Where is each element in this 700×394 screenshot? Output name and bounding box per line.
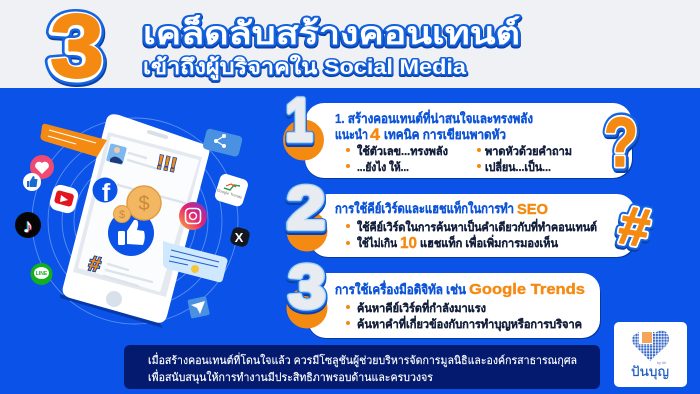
number 3: 3 xyxy=(288,254,326,320)
icon: send xyxy=(187,296,210,319)
tip 2 bullets: 10 xyxy=(400,235,417,252)
closing line 2: เพื่อสนับสนุนให้การทำงานมีประสิทธิภาพรอบด้านและครบวงจร xyxy=(148,369,433,384)
tip 1 subheading: 4 xyxy=(370,125,381,144)
tip 2 heading: การใช้คีย์เวิร์ดและแฮชแท็กในการทำ xyxy=(335,199,514,216)
big number 3: 3 xyxy=(49,0,103,98)
logo wordmark: ปันบุญ xyxy=(631,364,669,380)
panel: tip 1 xyxy=(283,86,639,183)
icon: question mark: ? xyxy=(604,103,638,181)
tip 1 bullets: พาดหัวด้วยคำถาม xyxy=(485,144,572,158)
icon: question mark: ? xyxy=(604,103,638,181)
home button xyxy=(106,291,122,307)
card 2 background xyxy=(310,198,636,258)
tip 2 bullets: แฮชแท็ก เพื่อเพิ่มการมองเห็น xyxy=(420,234,558,250)
card 3 background xyxy=(308,277,601,339)
number 1: 1 xyxy=(286,87,312,154)
big number 3: 3 xyxy=(50,0,104,100)
icon: line xyxy=(30,263,52,285)
main blue background xyxy=(0,88,700,394)
number 1: 1 xyxy=(286,86,312,154)
tip 2 heading: SEO xyxy=(517,201,548,218)
logo: Punboon xyxy=(614,322,687,387)
orange speech bubble xyxy=(40,124,107,157)
tip 1 heading: 1. สร้างคอนเทนต์ที่น่าสนใจและทรงพลัง xyxy=(335,109,533,126)
orbit rings xyxy=(32,118,238,324)
emoji xyxy=(191,265,199,273)
icon: question mark: ? xyxy=(604,103,638,181)
thumbs up xyxy=(118,220,145,245)
icon: tiktok: ♪ xyxy=(22,215,32,237)
icon: hash: # xyxy=(615,195,655,259)
number 2: 2 xyxy=(287,174,325,242)
orange circle 3 xyxy=(286,288,328,328)
title xyxy=(143,14,520,82)
profile picture xyxy=(106,143,127,165)
tip 1 bullets: ใช้ตัวเลข...ทรงพลัง xyxy=(357,144,448,158)
number 1: 1 xyxy=(286,86,312,154)
number 2: 2 xyxy=(287,174,325,242)
orange circle 2 xyxy=(286,210,328,252)
big coin: $ xyxy=(138,193,150,215)
number 2: 2 xyxy=(287,175,325,242)
icon: share xyxy=(202,128,243,157)
tip 2 bullets: ใช้ไม่เกิน xyxy=(357,236,397,250)
tip 3 bullets: ค้นหาคำที่เกี่ยวข้องกับการทำบุญหรือการบริจาค xyxy=(357,315,582,332)
icon: youtube xyxy=(48,183,80,215)
closing line 1: เมื่อสร้างคอนเทนต์ที่โดนใจแล้ว ควรมีโซลูชันผู้ช่วยบริหารจัดการมูลนิธิและองค์กรสาธารณกุศล xyxy=(148,352,577,367)
exclamation marks icon: !!! xyxy=(155,151,179,177)
phone shadow xyxy=(60,294,163,328)
header background xyxy=(0,0,700,88)
icon: tiktok: ♪ xyxy=(24,216,34,238)
speaker xyxy=(149,132,166,137)
number 2: 2 xyxy=(287,177,325,244)
icon: heart xyxy=(30,155,54,179)
like circle xyxy=(108,210,154,256)
tip 3 bullets xyxy=(346,299,582,332)
phone illustration xyxy=(60,114,209,328)
icon: question mark: ? xyxy=(605,105,639,183)
card 1 background xyxy=(305,107,633,179)
number 3: 3 xyxy=(288,254,326,320)
title line 2: เข้าถึงผู้บริจาคใน Social Media xyxy=(143,54,466,81)
tip 1 subheading: แนะนำ xyxy=(335,127,368,142)
logo tag: by Ub xyxy=(657,361,666,365)
number 1: 1 xyxy=(286,89,312,156)
phone body xyxy=(63,114,209,323)
icon: line: LINE xyxy=(36,271,48,277)
icon: instagram xyxy=(179,202,207,230)
icon: hash: # xyxy=(615,195,655,259)
tip 2 bullets: ใช้คีย์เวิร์ดในการค้นหาเป็นคำเดียวกับที่ทำคอนเทนต์ xyxy=(357,218,597,234)
phone screen xyxy=(73,132,202,297)
tip 1 bullets: ...ยังไง ให้... xyxy=(357,160,409,174)
icon: small like xyxy=(23,173,41,191)
tip 3 bullets: ค้นหาคีย์เวิร์ดที่กำลังมาแรง xyxy=(357,299,486,315)
tip 2 bullets xyxy=(346,218,597,252)
comment bubble xyxy=(163,241,228,282)
tip 1 bullets: เปลี่ยน...เป็น... xyxy=(485,158,551,174)
title line 1: เคล็ดลับสร้างคอนเทนต์ xyxy=(143,14,520,51)
title line 2: เข้าถึงผู้บริจาคใน Social Media xyxy=(143,55,466,82)
panel: tip 2 xyxy=(286,174,655,261)
number 3: 3 xyxy=(288,256,326,323)
number 3: 3 xyxy=(288,254,326,321)
tip 1 subheading: เทคนิค การเขียนพาดหัว xyxy=(384,127,506,142)
icon: tiktok: ♪ xyxy=(23,216,33,238)
tip 1 bullets xyxy=(346,144,572,174)
logo heart xyxy=(632,330,669,361)
logo orange square xyxy=(639,331,653,344)
icon: like with coins xyxy=(108,186,161,256)
icon: X xyxy=(229,226,251,248)
tip 3 heading: Google Trends xyxy=(469,281,585,298)
small coin: $ xyxy=(119,209,125,221)
post lines xyxy=(104,153,185,286)
icon: google trends: Google Trends xyxy=(216,187,243,200)
icon: X: X xyxy=(235,230,244,245)
panel: tip 3 xyxy=(286,254,601,339)
big number 3: 3 xyxy=(49,0,103,98)
icon: hashtag on phone: # xyxy=(87,252,103,277)
icon: hash: # xyxy=(614,197,654,261)
callout: closing note xyxy=(124,345,600,389)
icon: tiktok xyxy=(15,212,41,238)
title line 1: เคล็ดลับสร้างคอนเทนต์ xyxy=(143,16,520,52)
tip 3 heading: การใช้เครื่องมือดิจิทัล เช่น xyxy=(335,280,466,297)
tip 3 heading xyxy=(335,280,585,298)
icon: google trends xyxy=(214,173,249,208)
tip 1 subheading xyxy=(335,125,506,144)
icon: facebook xyxy=(92,178,118,207)
icon: hash: # xyxy=(615,195,655,259)
orange circle 1 xyxy=(283,120,324,160)
icon: facebook: f xyxy=(102,179,111,207)
